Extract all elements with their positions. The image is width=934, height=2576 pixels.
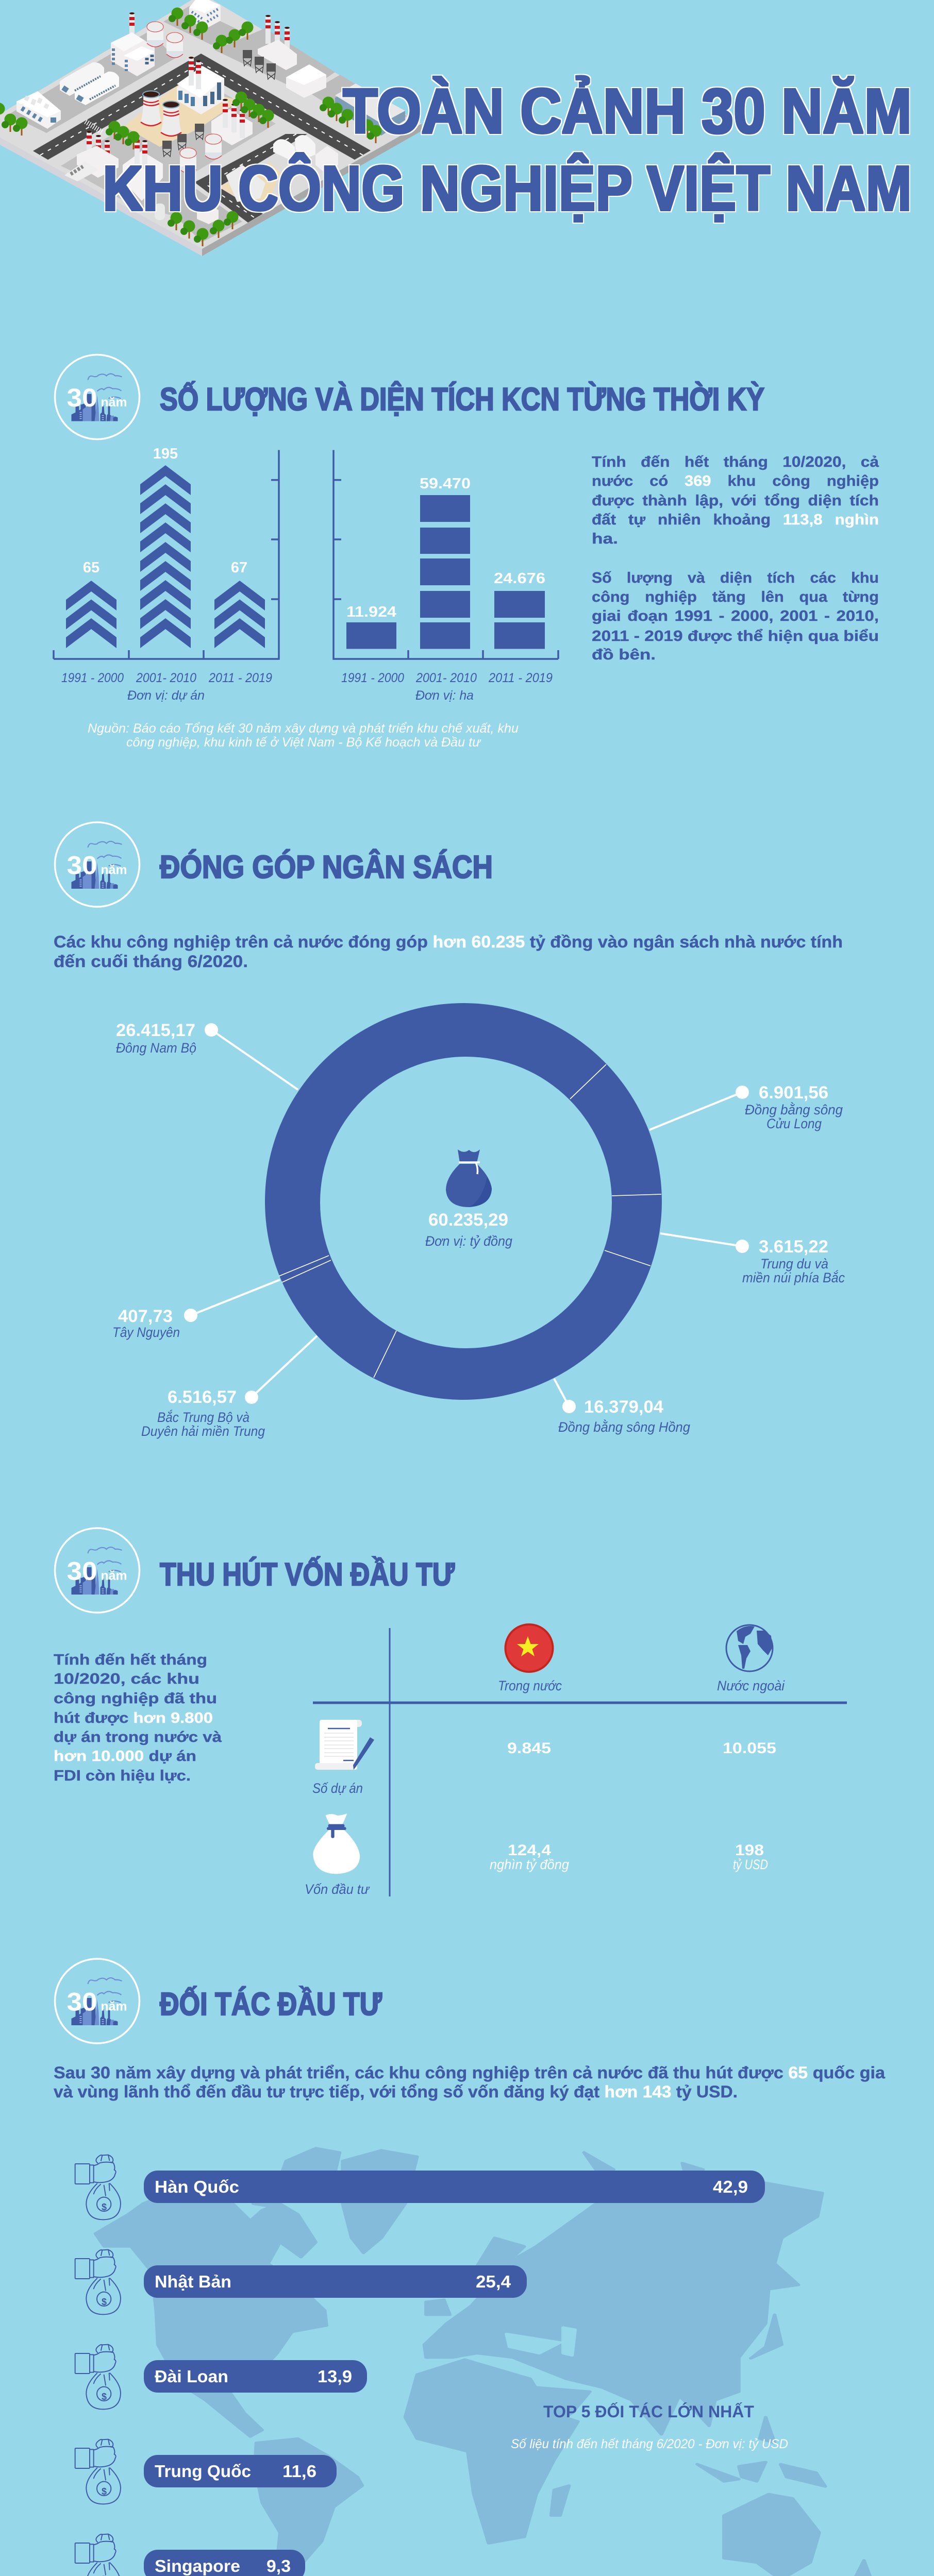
hangars	[60, 62, 104, 96]
values: 124,4	[508, 1842, 551, 1859]
bar: Trung Quốc	[75, 2439, 337, 2504]
title	[103, 76, 912, 224]
values	[490, 1740, 776, 1872]
chart: number of parks: 65	[83, 560, 99, 576]
left text: dự án trong nước và	[54, 1729, 222, 1745]
chart: number of parks	[54, 446, 279, 703]
badge: 30 năm	[55, 822, 139, 907]
bar chart: top 5 partners	[75, 2155, 765, 2576]
left text	[54, 1652, 222, 1784]
icon: money bag	[446, 1149, 492, 1207]
bar: Nhật Bản	[75, 2250, 527, 2314]
bar: Singapore: 9,3	[266, 2556, 291, 2575]
unit: Đơn vị: tỷ đồng	[425, 1233, 512, 1249]
bar: Đài Loan	[75, 2345, 367, 2409]
values: 10.055	[723, 1740, 776, 1757]
leaders and labels: 6.516,57	[168, 1387, 237, 1407]
total: 60.235,29	[428, 1210, 508, 1230]
transformer block	[16, 91, 61, 129]
roads	[33, 54, 371, 160]
side paragraph	[592, 454, 879, 663]
left text: hút được hơn 9.800	[54, 1710, 213, 1726]
chart: area: 59.470	[420, 476, 471, 492]
left text: hơn 10.000 dự án	[54, 1748, 196, 1765]
chart: area: 11.924	[346, 604, 396, 620]
leaders and labels: miền núi phía Bắc	[742, 1269, 845, 1285]
values: 198	[735, 1842, 764, 1859]
crosswalk	[86, 122, 102, 132]
table grid	[313, 1628, 847, 1896]
badge: 30 năm: năm	[101, 1999, 127, 2013]
side paragraph: Số lượng và diện tích các khu	[592, 570, 879, 586]
heading: SỐ LƯỢNG VÀ DIỆN TÍCH KCN TỪNG THỜI KỲ	[160, 382, 764, 417]
chart: number of parks: 2011 - 2019	[208, 671, 272, 685]
world map background	[95, 2148, 871, 2576]
side paragraph: được thành lập, với tổng diện tích	[592, 493, 879, 509]
bar: Đài Loan: 13,9	[318, 2367, 352, 2386]
badge: 30 năm: 30	[67, 383, 97, 412]
badge: 30 năm: 30	[67, 851, 97, 880]
leaders and labels: Cửu Long	[766, 1116, 822, 1131]
side paragraph: công nghiệp tăng lên qua từng	[592, 589, 879, 605]
intro text	[54, 2063, 885, 2101]
source note: công nghiệp, khu kinh tế ở Việt Nam - Bộ Kế hoạch và Đầu tư	[126, 735, 481, 750]
chart: number of parks: 67	[231, 560, 247, 576]
values: 9.845	[507, 1740, 551, 1757]
icon: vietnam flag	[505, 1624, 553, 1672]
intro text: Các khu công nghiệp trên cả nước đóng góp hơn 60.235 tỷ đồng vào ngân sách nhà nước tính	[54, 933, 843, 951]
leaders and labels: Bắc Trung Bộ và	[157, 1409, 249, 1425]
badge: 30 năm: 30	[67, 1988, 97, 2016]
row label: Số dự án	[312, 1781, 363, 1796]
side paragraph: Tính đến hết tháng 10/2020, cả	[592, 454, 879, 470]
side paragraph: 2011 - 2019 được thể hiện qua biểu	[592, 628, 879, 645]
leaders and labels: 26.415,17	[116, 1021, 195, 1040]
illustration: isometric industrial park	[0, 0, 422, 256]
cooling towers	[141, 91, 161, 126]
section 2: đóng góp ngân sách	[54, 822, 845, 1439]
donut chart	[265, 1003, 662, 1400]
chart: number of parks: Đơn vị: dự án	[127, 688, 205, 703]
icon: document and pen	[315, 1720, 374, 1770]
badge: 30 năm: năm	[101, 862, 127, 877]
trees	[0, 7, 381, 246]
intro text: và vùng lãnh thổ đến đầu tư trực tiếp, với tổng số vốn đăng ký đạt hơn 143 tỷ USD.	[54, 2082, 738, 2101]
icon: white money bag	[313, 1814, 360, 1874]
column labels: Trong nước	[498, 1678, 562, 1693]
section 4: đối tác đầu tư	[54, 1959, 885, 2576]
chart title: TOP 5 ĐỐI TÁC LỚN NHẤT	[543, 2402, 754, 2421]
leaders and labels: Đồng bằng sông	[745, 1101, 843, 1117]
right group	[265, 15, 271, 44]
side paragraph: ha.	[592, 531, 618, 547]
bar: Nhật Bản: Nhật Bản	[155, 2272, 231, 2291]
left text: FDI còn hiệu lực.	[54, 1768, 191, 1784]
chart: area: 2011 - 2019	[488, 671, 553, 685]
heading: ĐÓNG GÓP NGÂN SÁCH	[160, 850, 493, 885]
column labels: Nước ngoài	[717, 1678, 785, 1693]
bar: Trung Quốc: $	[102, 2486, 107, 2497]
leaders and labels: 16.379,04	[584, 1397, 663, 1417]
bar: Hàn Quốc	[75, 2155, 765, 2219]
lower left	[87, 131, 92, 160]
left text: 10/2020, các khu	[54, 1671, 199, 1687]
badge: 30 năm	[55, 354, 139, 439]
section 1: số lượng và diện tích	[54, 354, 879, 750]
leaders and labels: 407,73	[118, 1307, 173, 1326]
badge: 30 năm	[55, 1528, 139, 1613]
chart: area: 24.676	[494, 570, 545, 587]
chart: area: 1991 - 2000	[341, 671, 404, 685]
chart: area	[333, 450, 558, 703]
side paragraph: giai đoạn 1991 - 2000, 2001 - 2010,	[592, 608, 879, 624]
column labels	[498, 1678, 785, 1693]
bar: Nhật Bản: 25,4	[476, 2272, 511, 2291]
leaders and labels: Tây Nguyên	[112, 1325, 180, 1340]
chart note: Số liệu tính đến hết tháng 6/2020 - Đơn vị: tỷ USD	[511, 2437, 788, 2451]
intro text: đến cuối tháng 6/2020.	[54, 952, 248, 971]
factory with chimney	[129, 12, 135, 41]
source note	[88, 721, 519, 750]
left text: Tính đến hết tháng	[54, 1652, 207, 1668]
chart: number of parks: 1991 - 2000	[61, 671, 124, 685]
badge: 30 năm	[55, 1959, 139, 2043]
top building	[189, 0, 221, 29]
leaders and labels: Trung du và	[760, 1256, 828, 1272]
badge: 30 năm: năm	[101, 1568, 127, 1583]
bar: Hàn Quốc: Hàn Quốc	[155, 2177, 239, 2196]
section 3: thu hút vốn đầu tư	[54, 1528, 847, 1897]
badge: 30 năm: 30	[67, 1557, 97, 1586]
leaders and labels	[112, 1021, 845, 1439]
leaders and labels: Đông Nam Bộ	[116, 1040, 196, 1056]
bar: Đài Loan: $	[102, 2392, 107, 2402]
intro text	[54, 933, 843, 971]
central factory	[177, 66, 224, 114]
left text: công nghiệp đã thu	[54, 1690, 217, 1707]
source note: Nguồn: Báo cáo Tổng kết 30 năm xây dựng và phát triển khu chế xuất, khu	[88, 721, 519, 736]
heading: ĐỐI TÁC ĐẦU TƯ	[160, 1987, 382, 2022]
bar: Hàn Quốc: 42,9	[713, 2177, 748, 2196]
leaders and labels: Duyên hải miền Trung	[141, 1423, 265, 1439]
leaders and labels: Đồng bằng sông Hồng	[558, 1419, 690, 1435]
lower right	[273, 135, 315, 162]
chart: area: Đơn vị: ha	[415, 688, 474, 703]
chart: number of parks: 2001- 2010	[136, 671, 196, 685]
chart: area: 2001- 2010	[415, 671, 477, 685]
values: tỷ USD	[733, 1857, 768, 1872]
tanks	[147, 22, 163, 47]
chart: number of parks: 195	[153, 446, 178, 462]
values: nghìn tỷ đồng	[490, 1857, 569, 1872]
side paragraph: đất tự nhiên khoảng 113,8 nghìn	[592, 512, 879, 528]
heading: THU HÚT VỐN ĐẦU TƯ	[160, 1557, 455, 1592]
bar: Singapore	[75, 2534, 305, 2576]
bar: Trung Quốc: 11,6	[282, 2462, 316, 2481]
side paragraph: đồ bên.	[592, 647, 656, 663]
row label: Vốn đầu tư	[305, 1882, 370, 1897]
bar: Trung Quốc: Trung Quốc	[155, 2462, 251, 2481]
bar: Nhật Bản: $	[102, 2297, 107, 2307]
icon: globe	[726, 1625, 773, 1671]
glass building	[335, 83, 405, 135]
bar: Hàn Quốc: $	[102, 2202, 107, 2212]
bar: Đài Loan: Đài Loan	[155, 2367, 228, 2386]
leaders and labels: 6.901,56	[759, 1083, 828, 1103]
badge: 30 năm: năm	[101, 395, 127, 410]
leaders and labels: 3.615,22	[759, 1237, 828, 1257]
intro text: Sau 30 năm xây dựng và phát triển, các khu công nghiệp trên cả nước đã thu hút được 65 quốc gia	[54, 2063, 885, 2082]
bar: Singapore: Singapore	[155, 2556, 240, 2575]
side paragraph: nước có 369 khu công nghiệp	[592, 473, 879, 489]
